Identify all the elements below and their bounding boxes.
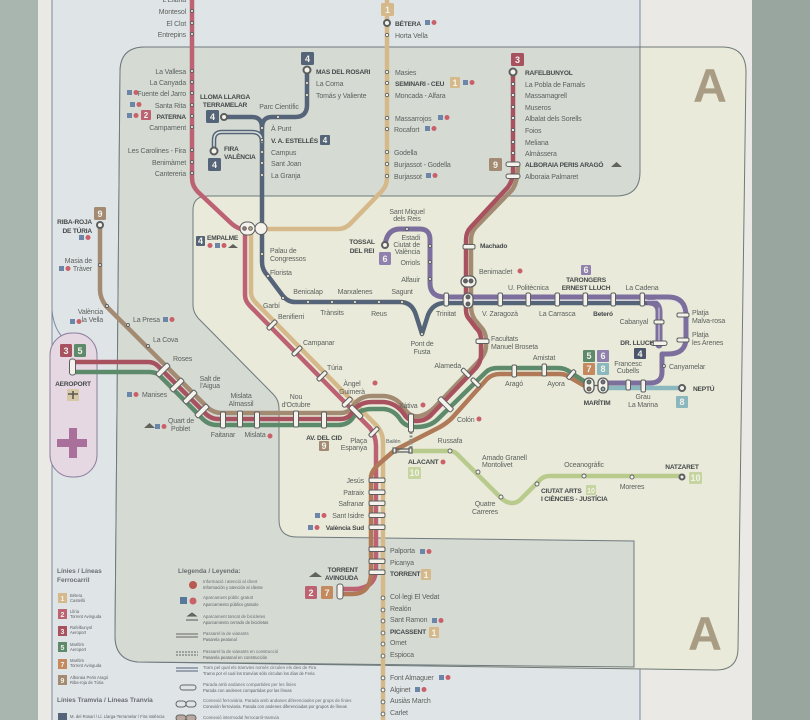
east corridor labels: Colón (457, 417, 475, 424)
line 4 labels (200, 69, 371, 180)
line 6 east labels: La Carrasca (539, 311, 576, 318)
legend: lines list: 5 (61, 645, 65, 652)
legend: lines list: M. del Rosari / Ll. Llarga-Terramelar / Fira València (70, 714, 165, 719)
central labels: Pont de (410, 341, 434, 348)
station labels south: Realón (390, 606, 412, 613)
line 4 labels: Tomás y Valiente (316, 93, 367, 100)
station labels centre and west (57, 209, 725, 516)
line 10 labels: Quatre (475, 501, 496, 508)
west corridor labels: Guimerà (339, 389, 365, 396)
station labels south: València Sud (326, 525, 364, 532)
number badges: 4 (305, 54, 310, 64)
line 2 labels: Benimàmet (152, 160, 186, 167)
number badges: 1 (423, 570, 429, 580)
line 2 pink (192, 0, 376, 589)
vertical bars on west corridor (220, 411, 414, 432)
station labels north (128, 0, 603, 181)
station labels south: Sant Isidre (332, 513, 364, 520)
line 10 labels: ALACANT (408, 459, 439, 466)
number badges: 8 (679, 397, 685, 407)
station labels south: Carlet (390, 710, 408, 717)
line 10 labels (386, 438, 699, 516)
station labels south: Safranar (338, 501, 365, 508)
line 1 labels: BÉTERA (395, 19, 421, 28)
east corridor labels: Aragó (505, 381, 523, 388)
line 3 labels: Massamagrell (525, 93, 567, 100)
line 10 labels: NATZARET (665, 464, 699, 471)
station labels south: PICASSENT (390, 629, 426, 636)
station labels south: Ausiàs March (390, 698, 431, 705)
central labels: Palau de (270, 248, 297, 255)
line 3 labels: Albalat dels Sorells (525, 116, 582, 123)
legend: lines list: Rafelbunyol (70, 625, 92, 630)
central labels: Garbí (263, 303, 280, 310)
line 10 labels: Amado Granell (482, 455, 527, 462)
overlap of zones (115, 47, 640, 667)
line 6 west labels: dels Reis (393, 216, 421, 223)
station labels south: Font Almaguer (390, 675, 434, 682)
line 4 labels: Parc Científic (259, 104, 299, 111)
line 2 labels: Les Carolines - Fira (128, 148, 186, 155)
east corridor labels: Alameda (434, 363, 461, 370)
central labels: Congressos (270, 256, 307, 263)
line 6 west labels: Ciutat de (393, 242, 420, 249)
legend: symbols: Pasarela peatonal (203, 637, 237, 642)
park and ride icons (59, 20, 622, 692)
number badges: 6 (600, 351, 606, 361)
line 4 labels: La Granja (271, 173, 301, 180)
line 2 paterna badge (141, 110, 151, 120)
line 3 labels: Meliana (525, 140, 549, 147)
station labels south: TORRENT (390, 571, 421, 578)
torrent corridor bars (70, 359, 385, 599)
legend: symbols: Passarel·la de vianants en construcció (203, 649, 279, 654)
west corridor labels: Àngel (343, 379, 361, 388)
line 6 east labels: Platja (692, 332, 709, 339)
line 6 east labels: ERNEST LLUCH (562, 285, 611, 292)
line 9 labels (57, 219, 178, 344)
line 2 labels: La Canyada (150, 80, 186, 87)
legend: lines list: Ferrocarril (57, 577, 90, 584)
east corridor labels: Francesc (614, 361, 642, 368)
line 6 west labels: Trinitat (436, 311, 456, 318)
line 10 labels: I CIÈNCIES - JUSTÍCIA (541, 494, 608, 503)
line 9 labels: RIBA-ROJA (57, 219, 92, 226)
central labels: Trànsits (320, 310, 344, 317)
blue background zone (52, 0, 640, 720)
line 9 labels: DE TÚRIA (62, 226, 92, 235)
legend: lines list: Alboraia Peris Aragó (70, 675, 109, 680)
station labels south (325, 478, 439, 717)
line 6 west labels: DEL REI (350, 248, 375, 255)
left wall strip (0, 0, 38, 720)
line 2 labels: Cantereria (155, 171, 186, 178)
line 6 east labels (479, 243, 725, 371)
airport capsule: 3 (63, 346, 69, 356)
station labels south: TORRENT (328, 567, 358, 574)
line 6 inner branch (650, 302, 659, 345)
legend: symbols: Tram pel qual els tramvies només circulen els dies de Fira (203, 665, 317, 670)
central labels: Benicalap (293, 289, 323, 296)
right wall strip (752, 0, 810, 720)
number badges: 1 (385, 5, 390, 15)
line 6 east labels: U. Politècnica (508, 285, 549, 292)
west corridor labels: Salt de (200, 376, 221, 383)
zone A (115, 47, 746, 670)
line 6 east labels: Beteró (593, 311, 613, 318)
line 2 labels: Entrepins (158, 32, 187, 39)
number badges: 7 (586, 364, 592, 374)
legend: lines list: Torrent Avinguda (70, 663, 102, 668)
line 2 labels: Montesol (159, 9, 187, 16)
line 6 east labels: Platja (692, 310, 709, 317)
line 9 tan (100, 164, 518, 416)
station labels south: Patraix (343, 490, 365, 497)
line 9 labels: La Presa (133, 317, 160, 324)
line 1 labels: Moncada - Alfara (395, 93, 446, 100)
line 10 labels: Montolivet (482, 462, 513, 469)
west corridor labels: l'Aigua (200, 383, 220, 390)
line 3 labels: La Pobla de Farnals (525, 82, 585, 89)
machado interchange (461, 276, 476, 308)
number badges: 4 (198, 236, 203, 246)
fira inner stripe (214, 132, 262, 146)
terminus rings (97, 20, 685, 480)
station labels south: Col·legi El Vedat (390, 594, 439, 601)
legend: symbols: Connexió ferroviària. Parada amb andanes diferenciades per grups de línies (203, 698, 352, 703)
maritim interchange (584, 378, 608, 393)
number badges: 1 (431, 628, 437, 638)
line 1 labels: Burjassot - Godella (394, 162, 451, 169)
west corridor labels: AV. DEL CID (306, 435, 342, 442)
legend: symbols: Aparcament públic gratuït (203, 595, 254, 600)
line 6 east labels: V. Zaragozà (482, 311, 518, 318)
central labels: Sagunt (391, 289, 413, 296)
west corridor labels: Nou (290, 394, 302, 401)
line 9 labels: la Vella (82, 317, 103, 324)
number badges: 4 (637, 349, 643, 359)
number badges: 8 (600, 364, 606, 374)
central labels: Benifierri (278, 314, 305, 321)
line 4 labels: V. A. ESTELLÉS (271, 136, 319, 145)
number badges: 9 (493, 160, 498, 170)
west corridor labels: Faitanar (211, 432, 236, 439)
legend: symbols: Parada amb andanes compartides per les línies (203, 682, 297, 687)
station labels south: Jesús (346, 478, 365, 485)
line 10 light green (411, 451, 682, 503)
line 10 stops (448, 449, 634, 499)
north corridor bars (463, 162, 520, 344)
legend: symbols: Tramo por el cual los tranvías sólo circulan los días de Feria (203, 671, 315, 676)
empalme interchange (240, 222, 267, 235)
legend: symbols: Passarel·la de vianants (203, 631, 249, 636)
station labels south: Omet (390, 640, 407, 647)
number badges: 9 (97, 209, 103, 219)
line 4 labels: À Punt (271, 124, 291, 133)
legend: lines list: Llíria (70, 609, 80, 614)
line 2 paterna badge: 2 (144, 111, 149, 120)
line 6 west labels (349, 209, 456, 318)
line 6 east labels: Benimaclet (479, 269, 512, 276)
number badges: 10 (690, 473, 701, 483)
number badges: 10 (587, 488, 595, 495)
line 3 labels: RAFELBUNYOL (525, 70, 573, 77)
line 1 labels: Horta Vella (395, 33, 428, 40)
legend: lines list: 2 (61, 612, 65, 619)
central labels: Túria (327, 365, 342, 372)
legend: lines list: 3 (61, 629, 65, 636)
line 2 labels: El Clot (166, 21, 186, 28)
number badges: 4 (210, 112, 215, 122)
line 3 labels (525, 70, 603, 181)
number badges: 5 (586, 351, 592, 361)
number badges: 2 (308, 588, 314, 598)
line 4 labels: LLOMA LLARGA (200, 94, 250, 101)
east corridor labels: NEPTÚ (693, 384, 715, 393)
station labels south: Espioca (390, 652, 414, 659)
alacant dashed link (410, 432, 412, 450)
line 2 labels: Santa Rita (155, 103, 186, 110)
west corridor labels: Quart de (168, 418, 194, 425)
airport capsule: AEROPORT (55, 381, 91, 388)
line 1 labels: Rocafort (394, 127, 419, 134)
line 6 east labels: Malva-rosa (692, 318, 725, 325)
legend: lines list: Marítim (70, 642, 84, 647)
line 4 labels: VALÈNCIA (224, 152, 256, 161)
line 6 centre stripes (450, 300, 683, 345)
number badges (94, 3, 702, 638)
line 6 east labels: Machado (480, 243, 507, 250)
legend: symbols: Llegenda / Leyenda: (178, 568, 240, 575)
line 6 east labels: Canyamelar (669, 364, 706, 371)
west corridor labels: Mislata (230, 393, 252, 400)
west corridor labels: Manises (142, 392, 168, 399)
east corridor labels: Grau (636, 394, 651, 401)
line 7 brown (340, 374, 590, 594)
west corridor labels: Almassil (229, 401, 254, 408)
legend: lines list: Línies Tramvia / Líneas Tranvía (57, 697, 153, 704)
railway and tram lines (73, 0, 686, 720)
number badges: 9 (321, 441, 327, 451)
central labels (207, 235, 434, 372)
central labels: Reus (371, 311, 388, 318)
line 2 labels: PATERNA (156, 114, 186, 121)
legend: lines list: 1 (61, 596, 65, 603)
legend: lines list: Marítim (70, 658, 84, 663)
legend: lines list: Aeroport (70, 647, 87, 652)
number badges: 3 (515, 55, 520, 65)
line 9 labels: Masia de (65, 258, 92, 265)
line 2 labels: Campament (149, 125, 186, 132)
east corridor labels: Cubells (617, 368, 640, 375)
number badges: 6 (583, 265, 589, 275)
line 1 orange (251, 0, 387, 720)
line 9 labels: Tràver (73, 266, 93, 273)
airport capsule (50, 310, 97, 477)
line 3 red (73, 72, 513, 421)
line 6 west labels: Sant Miquel (389, 209, 425, 216)
alacant footbridge (393, 448, 412, 453)
legend: symbols: Pasarela peatonal en construcción (203, 655, 268, 660)
line 3 labels: Alboraia Palmaret (525, 174, 578, 181)
line 4 labels: Campus (271, 150, 297, 157)
line 6 east labels: les Arenes (692, 340, 724, 347)
line 1 labels: SEMINARI - CEU (395, 81, 445, 88)
line 3 stops (511, 82, 515, 155)
line 6 east labels: DR. LLUCH (620, 340, 654, 347)
line 10 labels: CIUTAT ARTS (541, 488, 582, 495)
legend: symbols: Aparcament tancat de bicicletes (203, 614, 266, 619)
legend: symbols: Aparcamiento cerrado de bicicletas (203, 620, 268, 625)
line 6 west labels: València (395, 249, 420, 256)
east corridor labels: Amistat (533, 355, 555, 362)
line 2 stops (190, 10, 194, 174)
station labels south: Palporta (390, 548, 415, 555)
legend: symbols: Informació i atenció al client (203, 579, 258, 584)
line 4 and misc stops (98, 82, 666, 368)
west corridor labels: d'Octubre (282, 402, 311, 409)
line 10 labels: Bailén (386, 439, 400, 445)
central labels: EMPALME (207, 235, 239, 242)
line 4 labels: TERRAMELAR (203, 102, 248, 109)
line 9 labels: La Cova (153, 337, 178, 344)
line 6 purple (385, 229, 686, 383)
west corridor labels: Roses (173, 356, 193, 363)
airport capsule: 5 (77, 346, 83, 356)
line 4 labels: Sant Joan (271, 161, 301, 168)
station labels south: Sant Ramon (390, 617, 428, 624)
legend: lines list: Bétera (70, 593, 83, 598)
line 1 labels: Massarrojos (395, 116, 432, 123)
line 6 west labels: TOSSAL (349, 239, 375, 246)
east corridor labels: Xàtiva (399, 403, 418, 410)
east bars (444, 293, 689, 392)
line 6 east labels: Cabanyal (620, 319, 649, 326)
line 3 labels: Almàssera (525, 151, 557, 158)
number badges: 10 (409, 468, 420, 478)
central labels: Fusta (414, 349, 431, 356)
line 2 labels: Fuente del Jarro (137, 91, 186, 98)
line 3 labels: Museros (525, 105, 551, 112)
east corridor labels: MARÍTIM (584, 398, 611, 407)
number badges: 4 (212, 160, 217, 170)
line 4 labels: MAS DEL ROSARI (316, 69, 371, 76)
west corridor labels: Poblet (171, 426, 190, 433)
station labels south: Alginet (390, 687, 411, 694)
legend: symbols (176, 568, 352, 720)
legend: symbols: Conexión ferroviaria. Parada con andenes diferenciadas por grupos de líneas (203, 704, 347, 709)
line 4 labels: La Coma (316, 81, 344, 88)
legend: lines list (57, 568, 165, 720)
west corridor labels (142, 356, 367, 452)
east corridor labels: Ayora (547, 381, 565, 388)
line 6 west labels: Alfauir (401, 277, 421, 284)
line 1 labels: Burjassot (394, 174, 422, 181)
east corridor labels (399, 336, 715, 424)
legend: symbols: Connexió intermodal ferrocarril-tramvia (203, 715, 279, 720)
number badges: 7 (324, 588, 330, 598)
line 1 labels: Masies (395, 70, 417, 77)
west corridor labels: Espanya (341, 445, 367, 452)
line 10 labels: Russafa (438, 438, 463, 445)
line 2 labels: La Vallesa (155, 69, 186, 76)
line 8 teal (603, 386, 684, 390)
east corridor labels: Facultats (491, 336, 519, 343)
line 6 east labels: La Cadena (626, 285, 659, 292)
number badges: 6 (382, 254, 388, 264)
central labels: Marxalenes (338, 289, 373, 296)
station labels south: Picanya (390, 560, 414, 567)
line 1 stops (381, 33, 389, 716)
line 4 labels: FIRA (224, 146, 239, 153)
big letter A bottom: A (688, 607, 722, 660)
diagonal bars (156, 319, 576, 438)
central labels: Florista (270, 270, 292, 277)
line 6 east labels: TARONGERS (566, 277, 607, 284)
line 2 labels (128, 0, 187, 178)
west corridor labels: Mislata (244, 432, 266, 439)
legend: symbols: Parada con andenes compartidas por las líneas (203, 688, 292, 693)
line 5 green (73, 368, 590, 427)
legend: lines list: Aeroport (70, 630, 87, 635)
east corridor labels: La Marina (628, 402, 658, 409)
number badges: 1 (452, 78, 458, 88)
line 10 labels: Moreres (620, 484, 645, 491)
station labels south: AVINGUDA (325, 575, 358, 582)
legend: lines list: Línies / Líneas (57, 568, 102, 575)
legend: lines list: Castelló (70, 598, 86, 603)
line 10 labels: Carreres (472, 509, 499, 516)
line 6 west labels: Estadi (401, 235, 421, 242)
line 4 slate (214, 70, 655, 334)
legend: lines list: Torrent Avinguda (70, 614, 102, 619)
line 6 west labels: Orriols (400, 260, 421, 267)
east corridor labels: Manuel Broseta (491, 344, 538, 351)
big letter A top: A (693, 59, 727, 112)
line 9 labels: València (78, 309, 103, 316)
number badges: 4 (323, 136, 328, 145)
line 3 labels: ALBORAIA PERIS ARAGÓ (525, 160, 603, 169)
legend: lines list: 9 (61, 678, 65, 685)
line 10 labels: Oceanogràfic (564, 462, 605, 469)
stations (70, 10, 689, 716)
legend: symbols: Aparcamiento público gratuito (203, 602, 259, 607)
line 3 labels: Foios (525, 128, 542, 135)
line 1 labels: Godella (394, 150, 417, 157)
legend: lines list: Riba-roja de Túria (70, 680, 104, 685)
legend: symbols: Información y atención al cliente (203, 585, 263, 590)
legend: lines list: 7 (61, 662, 65, 669)
central labels: Campanar (303, 340, 335, 347)
west corridor labels: Plaça (350, 438, 367, 445)
line 1 labels (394, 19, 451, 181)
